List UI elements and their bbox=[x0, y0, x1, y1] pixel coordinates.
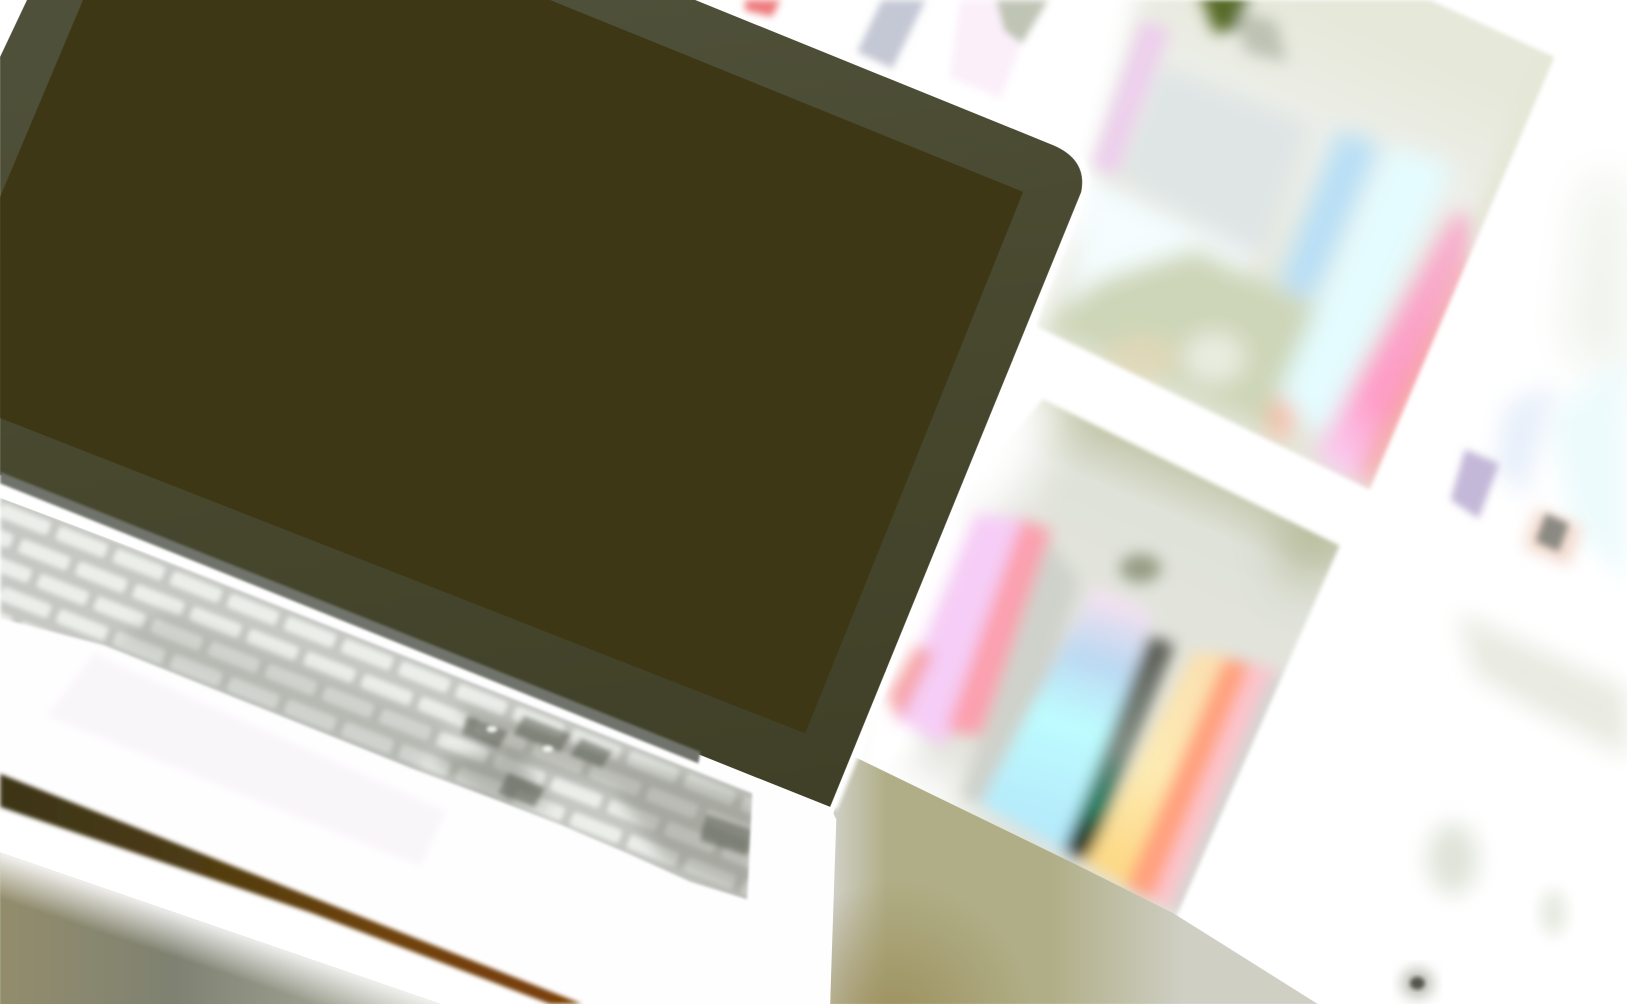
trackpad bbox=[47, 653, 446, 866]
bookshelf: top-left compartment sliver bbox=[745, 0, 1048, 99]
dark object core bbox=[1410, 977, 1425, 989]
keyboard bbox=[0, 487, 763, 902]
lavender book bbox=[1451, 449, 1499, 519]
screen bbox=[0, 0, 1023, 733]
dark object bbox=[1402, 969, 1433, 998]
grey object bbox=[1536, 513, 1569, 552]
lid hinge strip bbox=[0, 472, 700, 763]
base front edge bbox=[0, 774, 582, 1004]
foreground blurred desk bbox=[0, 853, 441, 1004]
lid bezel bbox=[0, 0, 1082, 807]
darker keys at right of keyboard bbox=[104, 612, 757, 900]
base deck bbox=[0, 475, 836, 1004]
laptop base bbox=[0, 475, 836, 1004]
desk surface bbox=[830, 755, 1318, 1004]
bookshelf: right compartment bbox=[1451, 176, 1627, 581]
laptop lid bbox=[0, 0, 1082, 809]
bookshelf: lower-right compartment bbox=[1402, 612, 1627, 998]
bookshelf: upper centre compartment bbox=[1038, 0, 1555, 490]
white gap under hinge bbox=[0, 481, 830, 809]
white halo behind lid bbox=[830, 143, 1082, 807]
small grey object with warm halo bbox=[1523, 508, 1582, 566]
bookshelf: lower centre compartment bbox=[882, 399, 1341, 916]
